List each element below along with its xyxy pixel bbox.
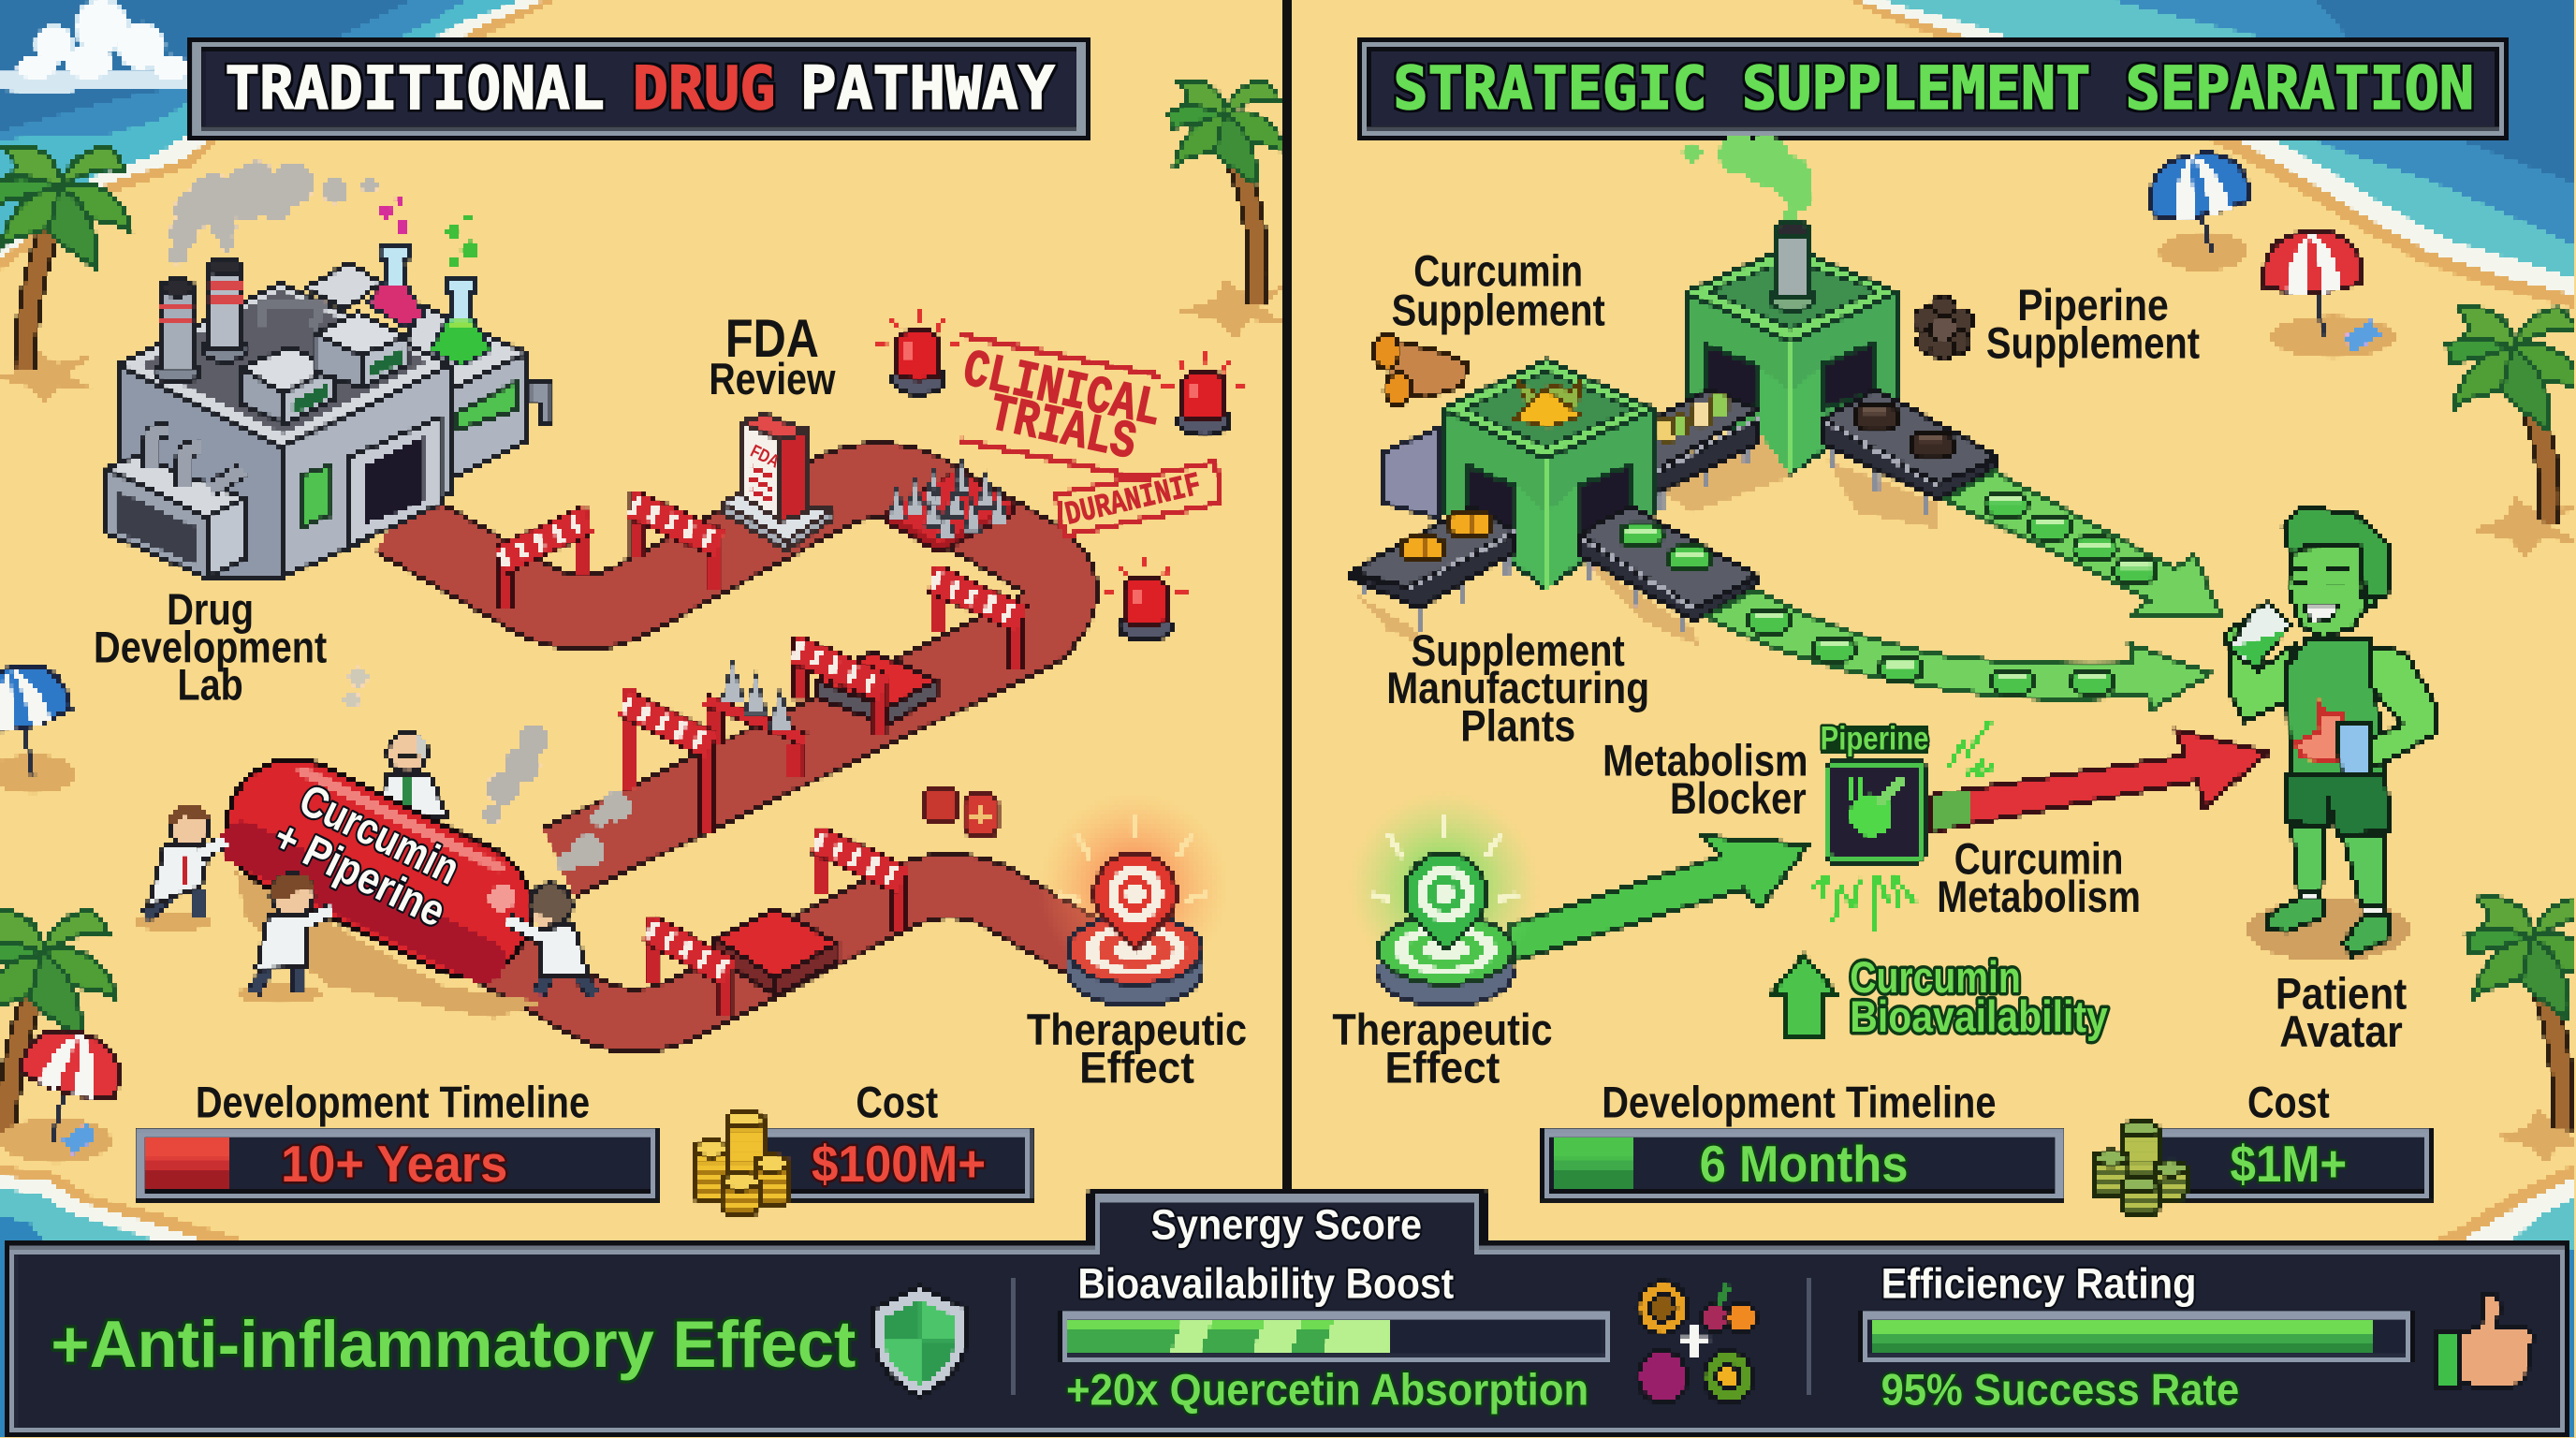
avatar ear — [2363, 580, 2378, 607]
ocean: bottom left — [0, 1167, 263, 1438]
label: metabolism blocker: Blocker — [1670, 774, 1807, 824]
heading: strategic supplement separation: STRATEGIC SUPPLEMENT SEPARATION — [1393, 53, 2474, 123]
rooftop box right — [314, 312, 407, 388]
green smoke — [1682, 135, 1814, 225]
pink flask — [368, 245, 424, 327]
red pressure pad: lower — [714, 909, 838, 996]
barrier 7 — [649, 916, 729, 1017]
icon: curcumin root — [1373, 333, 1469, 406]
label: drug development lab: Drug — [167, 585, 254, 635]
factory walls and roof — [118, 263, 450, 579]
cost bar: left — [748, 1127, 1035, 1201]
avatar neck and face — [2289, 546, 2365, 638]
label: curcumin supplement — [1392, 246, 1605, 336]
value: $1M+: $1M+ — [2231, 1136, 2347, 1193]
avatar legs — [2291, 827, 2385, 905]
icon: fruit synergy cluster — [1638, 1282, 1756, 1403]
cost bar: right — [2149, 1127, 2433, 1201]
avatar shorts — [2285, 774, 2391, 836]
label: drug development lab: Development — [94, 623, 327, 672]
label: curcumin supplement: Supplement — [1392, 286, 1605, 336]
spike trap: upper — [887, 459, 1012, 552]
red arrow: blocker to stomach — [1932, 729, 2269, 831]
conveyor shadow: front — [1357, 559, 1701, 648]
red supply packs — [925, 788, 997, 836]
icon: cloud — [0, 0, 189, 95]
green coin stacks — [2093, 1122, 2187, 1214]
label: therapeutic effect right — [1332, 1005, 1553, 1093]
label: supplement manufacturing plants: Supplement — [1412, 626, 1625, 676]
capsule label: Curcumin — [292, 775, 467, 895]
scientist: right pushing — [507, 884, 594, 996]
alarm light: top left — [875, 309, 961, 394]
conveyor belt: right — [1823, 389, 1996, 514]
label: metabolism blocker — [1603, 736, 1808, 824]
label: patient avatar: Patient — [2276, 970, 2407, 1020]
divider between pathways — [1283, 0, 1293, 1199]
ocean: bottom right — [2415, 1164, 2576, 1438]
label: piperine supplement: Supplement — [1986, 319, 2200, 369]
heading: traditional drug pathway: TRADITIONAL — [225, 53, 605, 123]
metabolism blocker chip — [1823, 759, 1927, 864]
green flask — [431, 278, 491, 365]
label: drug development lab: Lab — [178, 661, 243, 711]
label: curcumin bioavailability: Bioavailability — [1850, 992, 2108, 1042]
label: piperine supplement: Piperine — [2017, 281, 2169, 330]
label: development timeline right: Development Timeline — [1602, 1078, 1996, 1127]
stamp: clinical trials: CLINICAL — [958, 340, 1166, 440]
green arrow: piperine stream to patient — [1945, 472, 2221, 616]
palm tree: right bottom — [2466, 898, 2576, 1164]
red therapeutic target — [1038, 792, 1229, 1005]
label: therapeutic effect left: Therapeutic — [1027, 1005, 1247, 1055]
scientist: left pushing — [133, 805, 225, 932]
drug development lab factory — [105, 161, 552, 579]
avatar left arm holding glass — [2224, 614, 2297, 721]
doorway — [350, 418, 440, 546]
label: curcumin bioavailability — [1850, 953, 2108, 1042]
red pressure pad: upper — [815, 653, 936, 725]
label: supplement manufacturing plants: Manufacturing — [1386, 664, 1649, 713]
palm tree: bottom left — [0, 910, 117, 1134]
bioavailability progress bar — [1058, 1310, 1612, 1364]
label: curcumin metabolism: Metabolism — [1937, 873, 2141, 922]
section dividers — [1012, 1277, 1808, 1397]
avatar socks — [2300, 892, 2384, 917]
flask bubbles — [379, 197, 479, 269]
conveyor belt: front right — [1580, 506, 1756, 631]
fda review document — [723, 414, 833, 550]
value: +20x quercetin absorption: +20x Quercetin Absorption — [1066, 1366, 1588, 1416]
stamp: clinical trials: TRIALS — [984, 384, 1141, 474]
avatar right arm — [2352, 646, 2438, 768]
label: cost left: Cost — [856, 1078, 938, 1127]
label: therapeutic effect left — [1027, 1005, 1247, 1093]
factory smoke — [168, 161, 378, 265]
palm tree: top centre — [1168, 81, 1290, 340]
capsule label — [266, 775, 467, 937]
label: supplement manufacturing plants — [1386, 626, 1649, 752]
beach umbrella: right blue — [2144, 146, 2252, 271]
stamp: clinical trials — [958, 340, 1166, 474]
barrier 4 — [795, 636, 884, 736]
label: curcumin metabolism — [1937, 835, 2141, 922]
green capsules on belt — [1620, 524, 1710, 570]
stamp: clinical trials lines — [961, 335, 1221, 536]
label: fda review: Review — [709, 355, 836, 404]
icon: piperine peppercorns — [1914, 296, 1973, 360]
label: efficiency rating: Efficiency Rating — [1881, 1260, 2197, 1308]
label: therapeutic effect right: Effect — [1385, 1044, 1500, 1093]
avatar shadow — [2246, 899, 2410, 961]
spike trap: lower — [705, 662, 805, 779]
alarm light: top right — [1162, 350, 1247, 435]
herb samples on belt — [1658, 394, 1728, 442]
palm tree: top left — [0, 147, 131, 404]
scientist: behind capsule — [376, 733, 446, 815]
development timeline bar: left — [135, 1127, 661, 1201]
gold coin stacks — [694, 1110, 788, 1214]
icon: thumbs up — [2435, 1293, 2533, 1388]
roof pipe — [263, 305, 322, 329]
avatar drinking glass — [2228, 603, 2291, 668]
label: development timeline left: Development Timeline — [196, 1078, 590, 1127]
ocean: top right — [1847, 0, 2576, 309]
effect: anti-inflammatory: +Anti-inflammatory Effect — [51, 1307, 856, 1381]
alarm light: right — [1103, 555, 1188, 640]
red road: lower section to target — [485, 886, 1088, 1020]
green arrow: curcumin stream to patient — [1707, 590, 2211, 710]
barrier 1 — [501, 507, 588, 609]
label: piperine supplement — [1986, 281, 2200, 369]
book cover text: FDA — [747, 442, 783, 473]
conveyor shadow: middle and right — [1653, 431, 1939, 529]
avatar mouth — [2304, 605, 2339, 623]
green screens — [300, 465, 332, 527]
value: 95% success rate: 95% Success Rate — [1881, 1366, 2239, 1416]
label: therapeutic effect left: Effect — [1079, 1044, 1194, 1093]
development timeline bar: right — [1541, 1127, 2065, 1201]
piperine capsules on belt — [1855, 404, 1954, 459]
rooftop box left — [240, 346, 333, 424]
label: patient avatar — [2276, 970, 2407, 1057]
value: 6 months: 6 Months — [1700, 1136, 1909, 1193]
piperine tag backing — [1819, 725, 1930, 755]
icon: shield — [874, 1286, 966, 1397]
curcumin factory tower — [1442, 360, 1654, 588]
barrier 6 — [816, 827, 903, 930]
label: fda review — [709, 309, 836, 404]
avatar hair — [2284, 506, 2391, 598]
title banner: strategic supplement separation — [1357, 37, 2510, 139]
label: cost right: Cost — [2247, 1078, 2330, 1127]
stamp: duration note: DURANINIF — [1061, 466, 1205, 535]
exhaust pipes — [151, 431, 243, 490]
beach umbrella: right red — [2261, 229, 2395, 359]
patient avatar — [2224, 506, 2438, 961]
lightning sparks — [1810, 720, 1995, 933]
beach umbrella: left blue — [0, 658, 76, 794]
orange capsules on belt — [1401, 513, 1492, 560]
efficiency progress bar — [1860, 1310, 2413, 1364]
label: curcumin supplement: Curcumin — [1413, 246, 1583, 296]
ocean: top left — [0, 0, 559, 271]
piperine factory tower — [1686, 222, 1897, 473]
heading: traditional drug pathway — [225, 53, 1055, 123]
smoke puffs around capsule — [344, 668, 631, 873]
capsule label: + Piperine — [266, 812, 453, 937]
palm tree: right top — [2446, 308, 2576, 558]
avatar water glass — [2338, 721, 2371, 781]
value: $100M+: $100M+ — [812, 1136, 986, 1193]
label: fda review: FDA — [725, 309, 819, 369]
title banner: traditional drug pathway — [189, 37, 1090, 139]
avatar stomach — [2297, 701, 2343, 761]
label: supplement manufacturing plants: Plants — [1460, 702, 1575, 752]
label: therapeutic effect right: Therapeutic — [1332, 1005, 1553, 1055]
chimneys — [154, 258, 248, 383]
green therapeutic target — [1349, 792, 1540, 1005]
heading: traditional drug pathway: DRUG — [633, 53, 775, 123]
label: curcumin metabolism: Curcumin — [1954, 835, 2123, 885]
label: piperine tag: Piperine — [1821, 720, 1928, 756]
label: drug development lab — [94, 585, 327, 711]
avatar eyes — [2293, 568, 2348, 585]
beach umbrella: left red — [0, 1020, 129, 1164]
green arrow: target to blocker — [1510, 836, 1808, 961]
lower machine block — [105, 455, 246, 579]
heading: traditional drug pathway: PATHWAY — [800, 53, 1055, 123]
barrier 2 — [633, 493, 720, 590]
vent grille — [115, 490, 198, 565]
scientist: bottom pushing — [237, 874, 332, 1004]
annex block — [394, 305, 552, 479]
up arrow: bioavailability — [1769, 955, 1838, 1035]
red road: upper winding section — [394, 480, 1060, 862]
avatar shoes — [2265, 899, 2389, 956]
hopper machine — [1382, 427, 1439, 518]
tab: synergy score: Synergy Score — [1150, 1200, 1422, 1248]
value: 10+ years: 10+ Years — [281, 1136, 507, 1193]
conveyor belt: middle — [1654, 389, 1758, 509]
barrier 3 — [933, 567, 1022, 668]
label: bioavailability boost: Bioavailability Boost — [1077, 1260, 1454, 1308]
avatar torso — [2287, 639, 2384, 774]
synergy score panel — [8, 1193, 2566, 1434]
label: curcumin bioavailability: Curcumin — [1850, 953, 2021, 1003]
label: patient avatar: Avatar — [2279, 1007, 2403, 1057]
conveyor belt: front left — [1351, 506, 1515, 633]
turmeric pile on roof — [1515, 381, 1580, 427]
barrier 5 — [624, 688, 711, 833]
red capsule: curcumin + piperine — [201, 734, 557, 1002]
label: metabolism blocker: Metabolism — [1603, 736, 1808, 785]
pill shadow — [235, 871, 542, 1019]
